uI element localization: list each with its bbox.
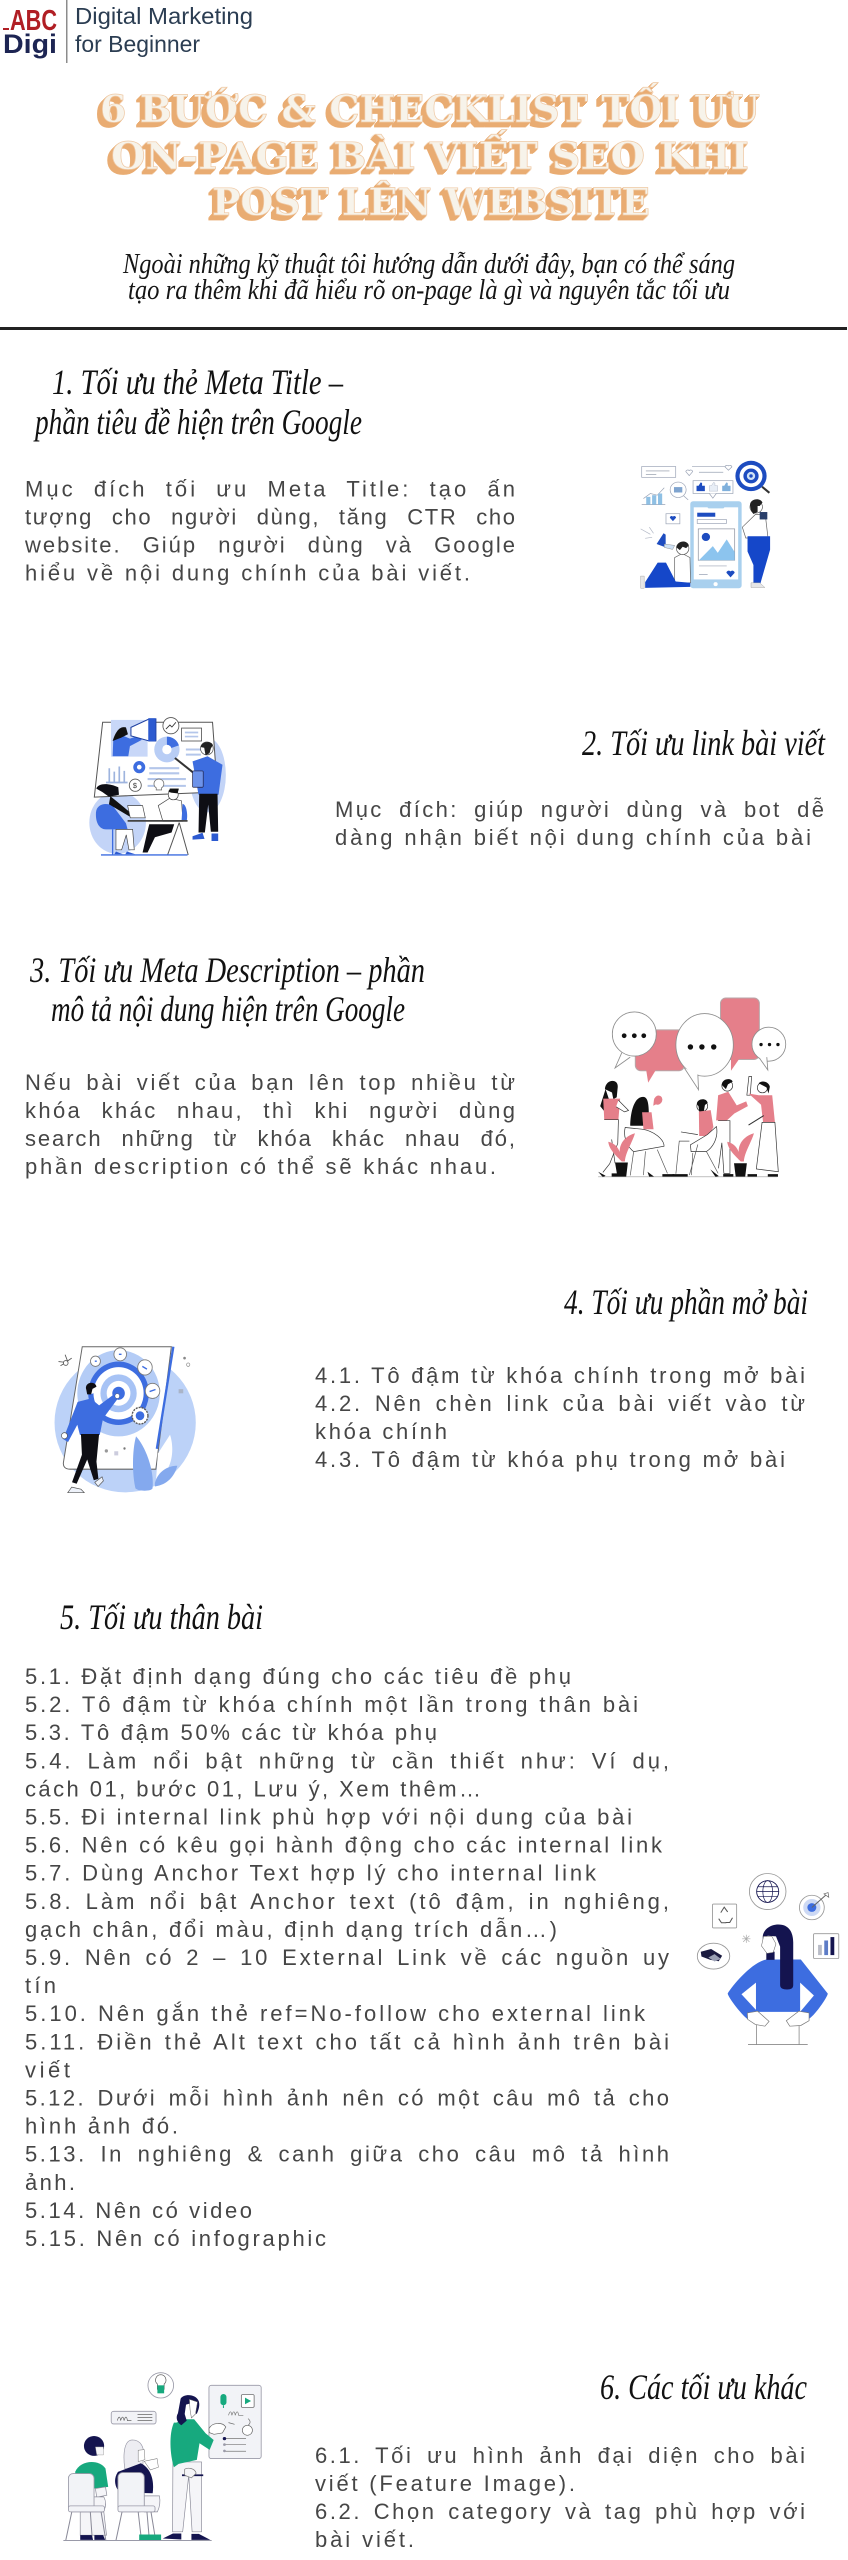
text: section 3 body [25, 1070, 515, 1179]
illustration: marketing team at board [89, 718, 226, 855]
text: section 3 body: phần description có thể sẽ khác nhau. [25, 1154, 496, 1179]
heading: section 5: 5. Tối ưu thân bài [60, 1597, 263, 1637]
illustration: teacher presenting [63, 2373, 261, 2541]
text: section 5 checklist [25, 1664, 669, 2251]
text: section 5 checklist: 5.3. Tô đậm 50% các từ khóa phụ [25, 1720, 437, 1745]
subtitle: tạo ra thêm khi đã hiểu rõ on-page là gì và nguyên tắc tối ưu [128, 275, 730, 306]
text: section 4 body: 4.2. Nên chèn link của bài viết vào từ [315, 1391, 805, 1416]
text: section 5 checklist: hình ảnh đó. [25, 2114, 178, 2139]
text: section 1 body: website. Giúp người dùng và Google [24, 532, 515, 558]
logo: ABC Digi: Digital Marketing [75, 3, 253, 29]
text: section 1 body: tượng cho người dùng, tăng CTR cho [25, 504, 515, 530]
text: section 4 body: khóa chính [315, 1419, 447, 1444]
illustration: woman with icons [697, 1874, 839, 2045]
text: section 6 body: bài viết. [315, 2527, 414, 2552]
text: section 5 checklist: cách 01, bước 01, Lưu ý, Xem thêm… [25, 1776, 481, 1801]
text: section 5 checklist: 5.13. In nghiêng & canh giữa cho câu mô tả hình [25, 2142, 669, 2167]
text: section 4 body [315, 1363, 805, 1472]
text: section 1 body [24, 476, 515, 586]
heading: section 3: mô tả nội dung hiện trên Google [51, 989, 405, 1029]
heading: section 3 [29, 950, 425, 1029]
text: section 5 checklist: ảnh. [25, 2170, 75, 2195]
text: section 5 checklist: 5.10. Nên gắn thẻ ref=No-follow cho external link [25, 2001, 646, 2026]
text: section 5 checklist: 5.6. Nên có kêu gọi hành động cho các internal link [25, 1833, 663, 1858]
text: section 3 body: khóa khác nhau, thì khi người dùng [25, 1098, 515, 1123]
heading: section 1: 1. Tối ưu thẻ Meta Title – [52, 362, 344, 402]
text: section 5 checklist: 5.11. Điền thẻ Alt text cho tất cả hình ảnh trên bài [25, 2029, 669, 2054]
text: section 6 body: viết (Feature Image). [315, 2471, 575, 2496]
text: section 5 checklist: 5.9. Nên có 2 – 10 External Link về các nguồn uy [25, 1945, 669, 1970]
text: section 5 checklist: viết [25, 2057, 70, 2082]
text: section 5 checklist: tín [25, 1973, 56, 1998]
logo: ABC Digi [3, 0, 253, 63]
subtitle: Ngoài những kỹ thuật tôi hướng dẫn dưới đây, bạn có thể sáng [122, 249, 735, 280]
text: section 5 checklist: 5.5. Đi internal link phù hợp với nội dung của bài [25, 1804, 632, 1830]
text: section 5 checklist: 5.8. Làm nổi bật Anchor text (tô đậm, in nghiêng, [25, 1889, 669, 1914]
text: section 5 checklist: 5.15. Nên có infographic [25, 2226, 326, 2251]
text: section 3 body: search những từ khóa khác nhau đó, [25, 1126, 515, 1151]
text: section 5 checklist: 5.14. Nên có video [25, 2198, 252, 2223]
text: section 3 body: Nếu bài viết của bạn lên top nhiều từ [25, 1070, 515, 1095]
text: section 5 checklist: 5.1. Đặt định dạng đúng cho các tiêu đề phụ [25, 1664, 571, 1689]
text: section 2 body: Mục đích: giúp người dùng và bot dễ [335, 797, 824, 822]
text: section 5 checklist: 5.12. Dưới mỗi hình ảnh nên có một câu mô tả cho [25, 2086, 669, 2110]
title [100, 82, 760, 224]
logo: ABC Digi: Digi [3, 29, 57, 59]
logo: ABC Digi: ABC [10, 5, 57, 37]
illustration: marketing team at board: $ [133, 781, 137, 790]
text: section 1 body: hiểu về nội dung chính của bài viết. [25, 560, 470, 586]
text: section 4 body: 4.1. Tô đậm từ khóa chính trong mở bài [315, 1363, 805, 1388]
heading: section 3: 3. Tối ưu Meta Description – phần [29, 950, 425, 990]
title: ON-PAGE BÀI VIẾT SEO KHI [111, 129, 749, 178]
text: section 5 checklist: 5.4. Làm nổi bật những từ cần thiết như: Ví dụ, [25, 1748, 669, 1773]
text: section 6 body: 6.1. Tối ưu hình ảnh đại diện cho bài [315, 2443, 805, 2468]
text: section 2 body: dàng nhận biết nội dung chính của bài [335, 825, 811, 850]
heading: section 1 [33, 362, 362, 442]
text: section 5 checklist: 5.2. Tô đậm từ khóa chính một lần trong thân bài [25, 1692, 638, 1717]
text: section 5 checklist: gạch chân, đổi màu, định dạng trích dẫn…) [25, 1917, 557, 1942]
logo: ABC Digi: for Beginner [75, 31, 200, 57]
text: section 6 body [315, 2443, 805, 2552]
subtitle [122, 249, 735, 306]
illustration: people with speech bubbles [598, 998, 786, 1177]
text: section 2 body [335, 797, 824, 850]
text: section 4 body: 4.3. Tô đậm từ khóa phụ trong mở bài [315, 1447, 785, 1472]
text: section 1 body: Mục đích tối ưu Meta Title: tạo ấn [25, 476, 515, 502]
title: 6 BƯỚC & CHECKLIST TỐI ƯU [100, 82, 760, 131]
title: POST LÊN WEBSITE [212, 180, 650, 224]
illustration: man touching target [55, 1347, 196, 1493]
text: section 6 body: 6.2. Chọn category và tag phù hợp với [315, 2499, 805, 2524]
illustration: phone and marketers [641, 461, 770, 588]
text: section 5 checklist: 5.7. Dùng Anchor Text hợp lý cho internal link [25, 1861, 597, 1886]
heading: section 1: phần tiêu đề hiện trên Google [33, 402, 362, 442]
